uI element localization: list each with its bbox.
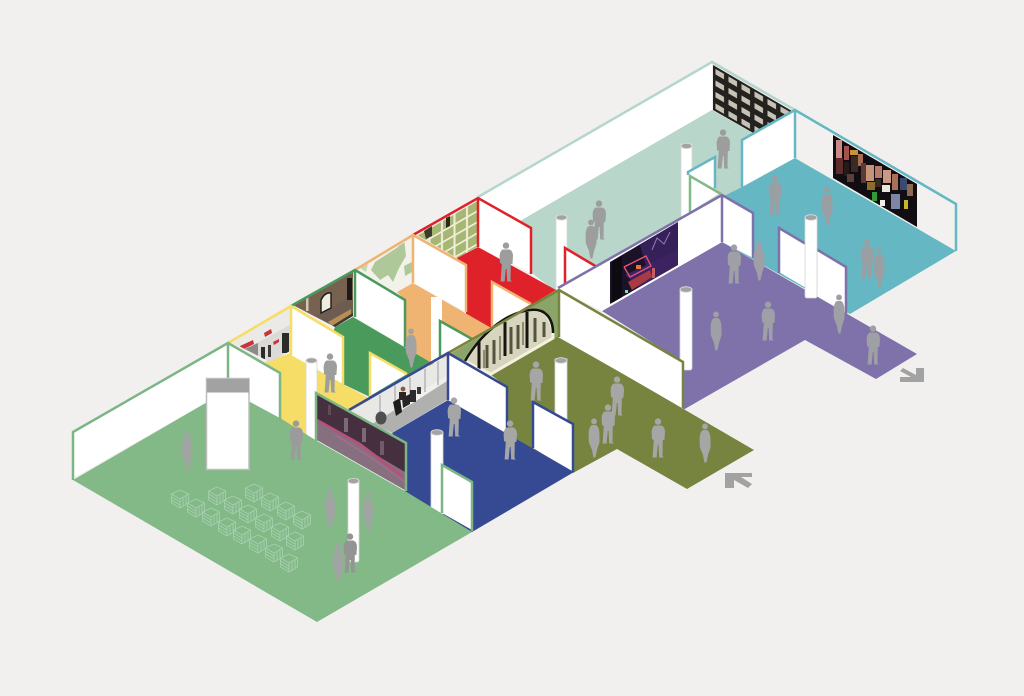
visitor <box>363 492 374 532</box>
olive right wall <box>558 290 683 408</box>
visitor <box>717 129 730 168</box>
column <box>306 358 317 442</box>
blue wall outline <box>349 353 507 433</box>
visitor <box>602 404 615 444</box>
visitor <box>593 200 606 240</box>
image: concert crowd <box>833 135 917 227</box>
room: teal hall <box>722 110 956 314</box>
teal floor <box>722 158 956 314</box>
teal wall outline <box>742 110 956 251</box>
room: violet hall <box>558 195 917 410</box>
visitor <box>589 418 600 458</box>
green partition <box>690 176 721 212</box>
image: pink-lit facade <box>317 395 405 490</box>
visitor <box>711 312 722 350</box>
yellow floor <box>265 353 372 442</box>
olive wall outline <box>448 290 683 408</box>
image: white gallery with red shoes <box>232 325 290 362</box>
room: olive <box>448 290 754 489</box>
violet partition right <box>816 249 846 314</box>
room: yellow <box>228 305 372 442</box>
light green left wall <box>73 343 228 478</box>
room: red <box>413 198 556 329</box>
image: grey lounge <box>351 356 447 433</box>
visitor <box>530 361 543 400</box>
column <box>555 358 567 429</box>
violet floor <box>602 242 917 410</box>
light green right wall <box>228 343 280 418</box>
light green partition <box>442 465 472 531</box>
yellow partition <box>370 353 407 396</box>
column <box>681 143 692 244</box>
mint floor <box>520 110 800 292</box>
red wall outline <box>413 198 531 274</box>
light green floor <box>73 390 472 622</box>
blue right wall <box>448 353 507 433</box>
image: grid of framed works <box>713 65 792 134</box>
yellow wall outline <box>228 306 343 384</box>
violet left wall <box>558 195 722 311</box>
white column <box>431 297 442 363</box>
visitor <box>834 294 845 334</box>
violet right wall <box>722 195 753 258</box>
teal partition <box>688 157 715 196</box>
visitor <box>333 544 344 582</box>
visitor <box>448 397 461 436</box>
teal left wall <box>742 110 795 187</box>
orange floor <box>397 283 493 366</box>
orange partition <box>492 282 531 327</box>
visitor <box>182 432 193 470</box>
visitor <box>504 420 517 460</box>
blue floor <box>392 400 574 532</box>
visitor <box>822 186 833 226</box>
column <box>680 287 692 370</box>
visitor <box>754 242 765 280</box>
olive floor <box>491 336 754 489</box>
blue partition <box>533 402 573 472</box>
visitor <box>700 424 711 462</box>
red floor <box>457 247 556 329</box>
visitor <box>344 533 357 572</box>
visitor <box>769 175 782 214</box>
column <box>348 478 359 562</box>
image: neon car <box>610 222 678 304</box>
column <box>431 430 443 515</box>
isometric exhibition floor plan <box>72 60 958 622</box>
image: brick building <box>294 272 353 327</box>
yellow right wall <box>291 307 343 384</box>
visitor <box>874 248 885 288</box>
visitor <box>324 353 337 392</box>
red partition <box>565 248 597 286</box>
column <box>805 215 817 298</box>
visitor <box>762 301 775 340</box>
light green wall outline <box>73 343 280 480</box>
green floor <box>330 317 430 397</box>
mint wall top edge <box>478 62 795 197</box>
olive back wall <box>450 291 558 375</box>
room: blue <box>345 352 574 532</box>
visitor <box>290 420 303 460</box>
visitor <box>611 376 624 416</box>
teal right wall <box>795 110 956 250</box>
green partition <box>440 321 472 357</box>
orange wall outline <box>355 235 466 312</box>
green right wall <box>355 271 405 347</box>
free-standing panel <box>206 378 249 470</box>
room: light green hall <box>73 343 472 622</box>
room: orange <box>355 235 493 366</box>
room: green <box>290 268 430 397</box>
violet partition left <box>779 228 806 288</box>
violet wall outline <box>558 195 753 288</box>
image: green tile wall <box>417 201 477 258</box>
visitor <box>861 239 874 278</box>
visitor <box>500 242 513 282</box>
red right wall <box>478 198 531 273</box>
visitor <box>867 325 880 364</box>
green wall outline <box>291 270 405 347</box>
column <box>556 215 567 292</box>
visitor <box>406 328 417 368</box>
orange right wall <box>413 235 466 312</box>
room: mint hall <box>478 62 800 292</box>
visitor <box>586 220 597 258</box>
visitor <box>728 244 741 284</box>
visitor <box>325 490 336 528</box>
image frame outline <box>316 393 406 491</box>
image: arched window <box>465 310 553 374</box>
image: green leaf map <box>360 242 412 292</box>
arrow: exit <box>900 368 924 382</box>
visitor <box>652 418 665 458</box>
seating rows <box>172 484 310 572</box>
mint back wall <box>478 62 712 221</box>
arrow: entrance <box>725 473 752 488</box>
